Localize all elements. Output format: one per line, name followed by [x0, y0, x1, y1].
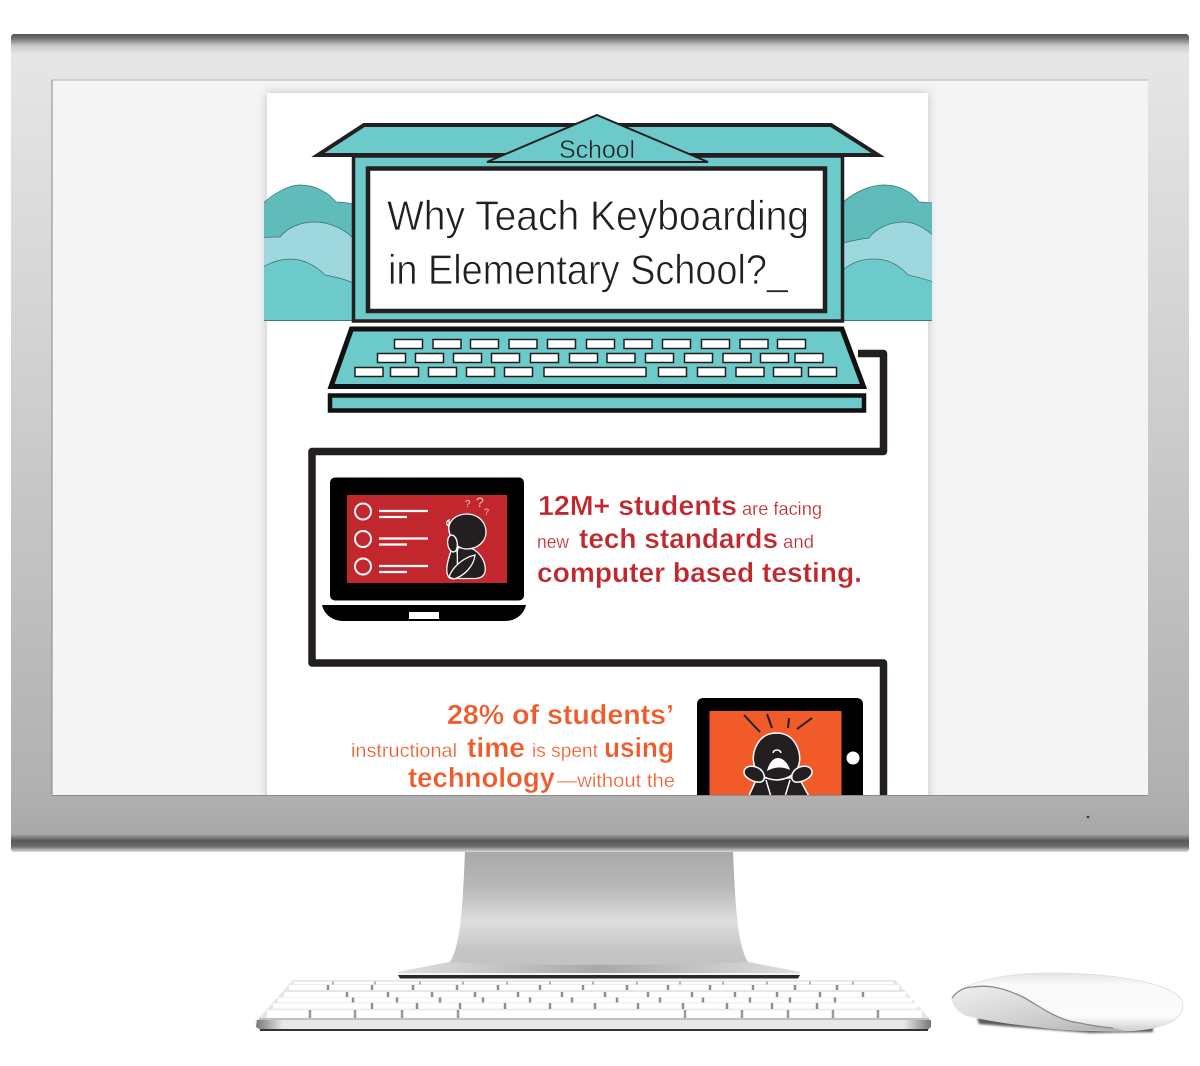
laptop base bar	[330, 396, 864, 410]
clouds right	[843, 185, 938, 320]
monitor frame	[11, 34, 1189, 852]
school building screen	[354, 156, 842, 321]
connecting cable	[312, 354, 884, 800]
stat: 28% of students: instructional	[351, 741, 457, 762]
power light	[1087, 816, 1089, 818]
stat: 12M+ students: computer based testing.	[537, 557, 862, 588]
stat: 28% of students: 28% of students’	[447, 699, 674, 730]
keyboard keys	[355, 340, 836, 376]
icon: tablet with stressed student	[697, 698, 863, 795]
question marks: ?	[476, 494, 484, 510]
stat: 12M+ students: are facing	[742, 499, 822, 519]
gable with school sign: School	[559, 136, 635, 164]
question marks: ?	[484, 507, 489, 517]
monitor stand	[398, 850, 800, 978]
thinking student	[447, 514, 486, 579]
keys	[267, 982, 922, 1018]
clouds left	[258, 185, 353, 320]
wireless mouse	[952, 973, 1183, 1033]
title: in Elementary School?_	[388, 246, 789, 293]
school roof	[318, 125, 878, 155]
stat: 28% of students: is spent	[532, 741, 599, 762]
wireless keyboard	[255, 980, 932, 1031]
quiz list	[355, 504, 428, 574]
stat: 12M+ students: new	[537, 532, 570, 552]
gable with school sign	[487, 115, 708, 164]
stat: 12M+ students: tech standards	[579, 523, 778, 554]
question marks	[465, 498, 489, 515]
screen	[52, 80, 1148, 813]
stat: 28% of students: using	[604, 732, 674, 763]
laptop keyboard deck	[331, 329, 864, 386]
stat: 28% of students: technology	[408, 762, 555, 793]
stressed student	[744, 733, 812, 800]
stat: 28% of students: —without the	[557, 771, 675, 792]
question marks: ?	[465, 499, 471, 510]
title window	[368, 168, 825, 311]
stat: 28% of students: time	[467, 732, 525, 763]
title	[387, 192, 809, 293]
infographic page	[258, 115, 938, 818]
stat: 12M+ students	[537, 490, 862, 588]
stat: 12M+ students: and	[783, 532, 814, 552]
stat: 28% of students	[351, 699, 675, 793]
title: Why Teach Keyboarding	[387, 192, 809, 239]
stat: 12M+ students: 12M+ students	[538, 490, 737, 521]
icon: laptop with thinking student	[322, 478, 526, 621]
